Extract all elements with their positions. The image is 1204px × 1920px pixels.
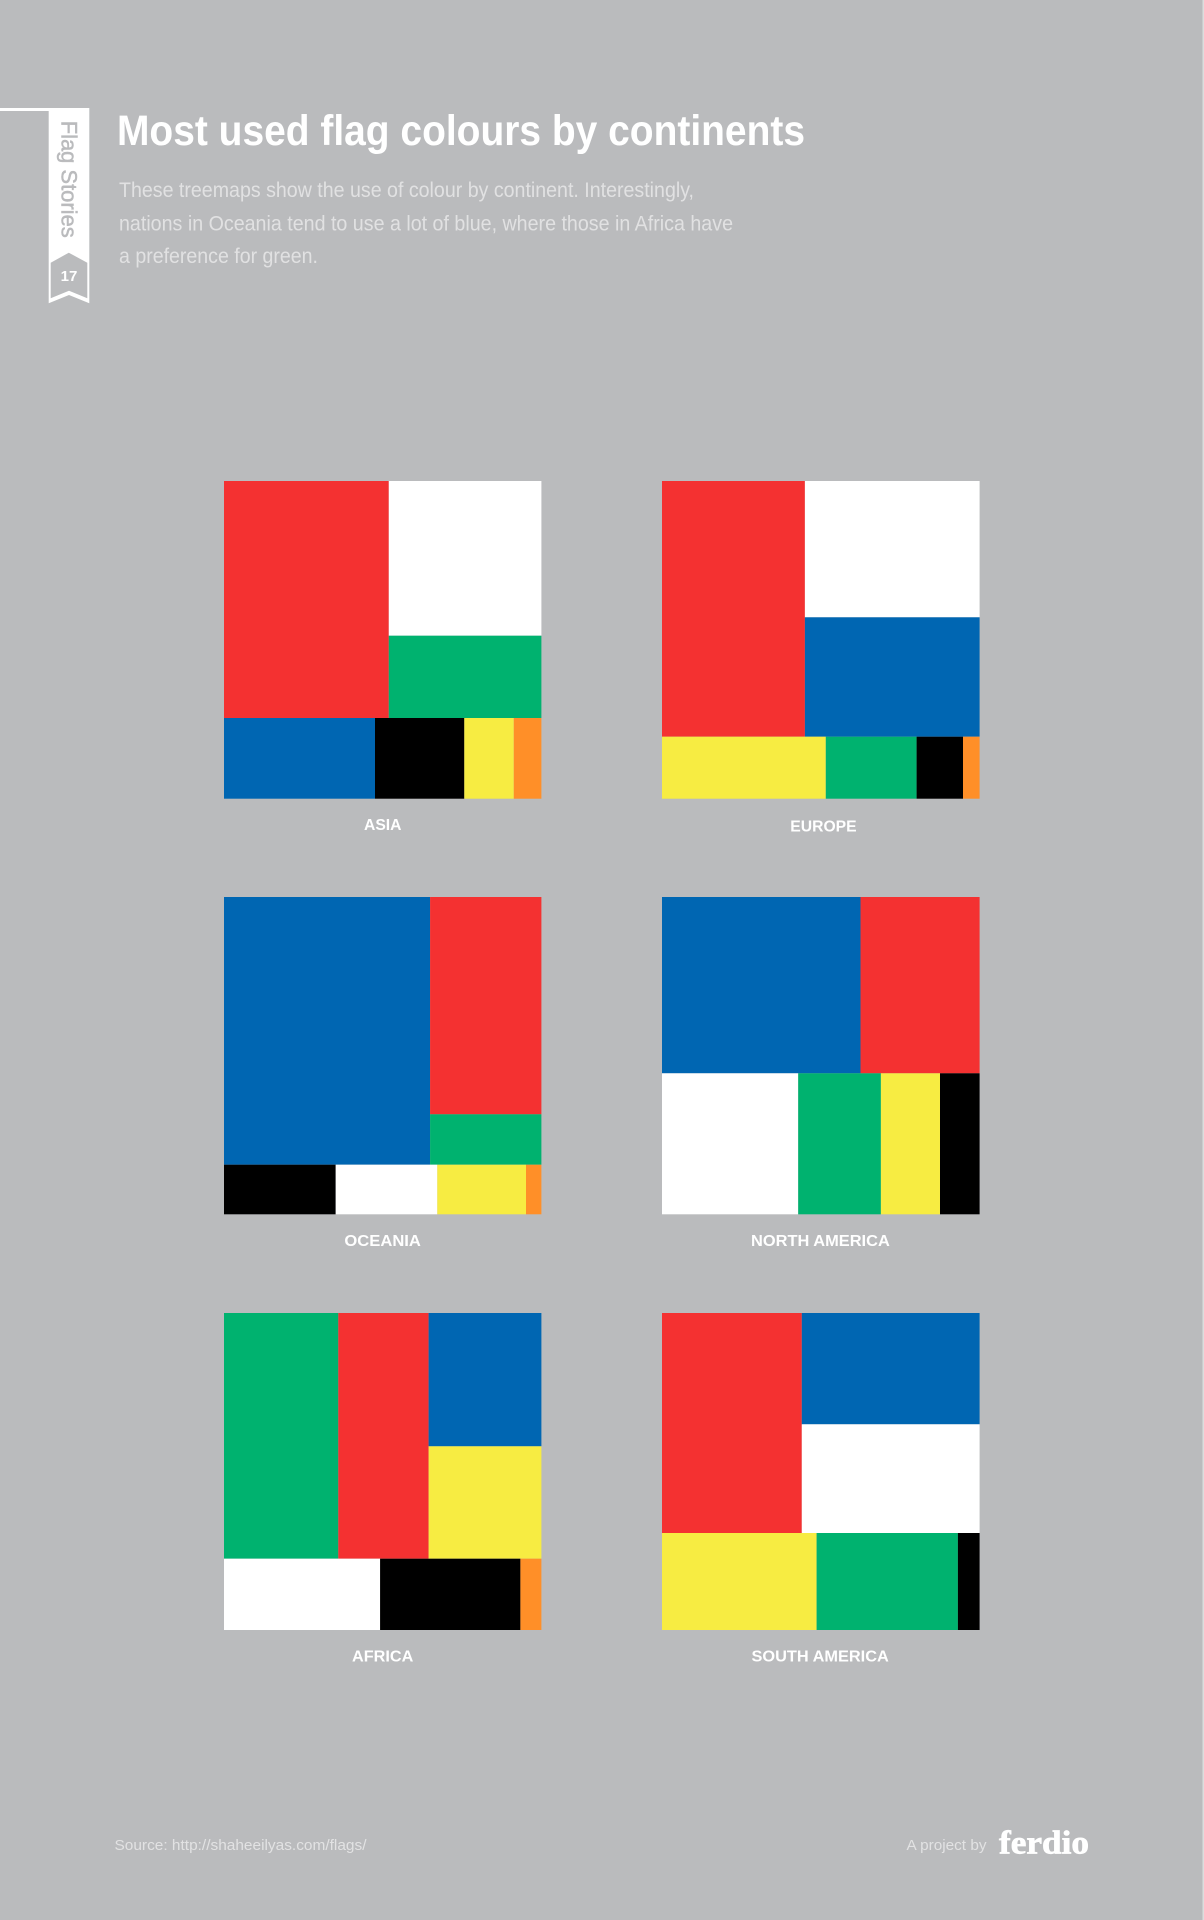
description text: a preference for green.	[119, 245, 318, 268]
treemap: Europe	[662, 481, 980, 799]
title: Most used flag colours by continents	[117, 107, 805, 155]
credit: a project by ferdio: A project by	[906, 1837, 987, 1854]
credit: a project by ferdio	[906, 1825, 1089, 1861]
ferdio wordmark: ferdio	[999, 1825, 1089, 1861]
ribbon number tab	[51, 253, 87, 298]
source note: Source: http://shaheeilyas.com/flags/	[114, 1837, 367, 1854]
description text: These treemaps show the use of colour by continent. Interestingly,	[119, 179, 694, 202]
label: Asia: ASIA	[364, 817, 402, 834]
page number: 17	[61, 268, 77, 285]
treemap: Asia	[224, 481, 541, 799]
ribbon: Flag Stories page marker	[0, 108, 89, 303]
label: North America: NORTH AMERICA	[751, 1233, 890, 1250]
label: Oceania: OCEANIA	[344, 1233, 421, 1250]
ribbon band	[49, 108, 89, 303]
treemap: Oceania	[224, 897, 541, 1214]
treemap: South America	[662, 1313, 980, 1630]
treemap: Africa	[224, 1313, 541, 1630]
description text: nations in Oceania tend to use a lot of blue, where those in Africa have	[119, 212, 733, 236]
treemap: North America	[662, 897, 980, 1214]
label: Africa: AFRICA	[352, 1649, 413, 1666]
ribbon label: Flag Stories	[57, 121, 82, 238]
label: Europe: EUROPE	[790, 818, 857, 835]
description text	[119, 179, 733, 268]
label: South America: SOUTH AMERICA	[752, 1649, 889, 1666]
